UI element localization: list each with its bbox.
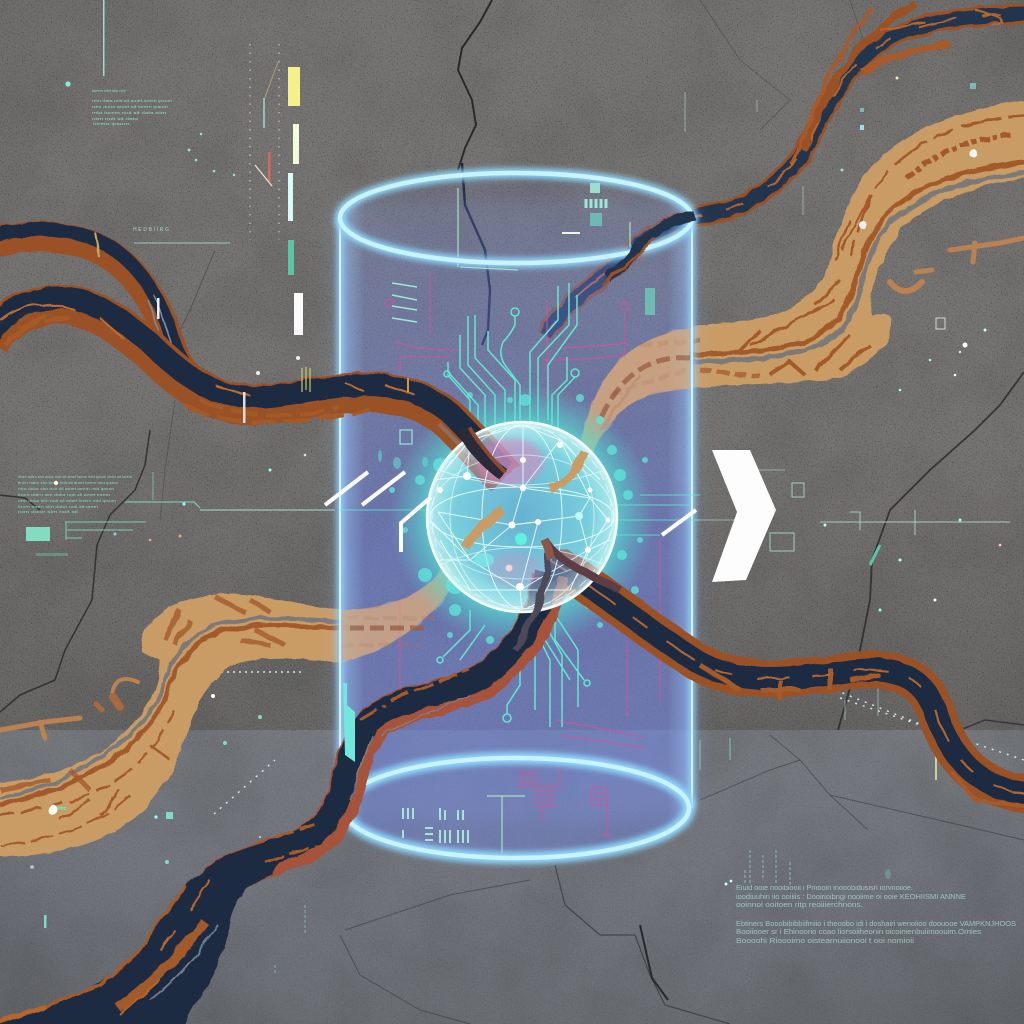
hud: top-left tiny readout: lorem ipsum <box>93 121 130 126</box>
hud: left readout block: ltrom datrn sim dolor nolt sit amet <box>18 504 99 509</box>
white dash marks <box>325 472 696 552</box>
hud: bottom-right caption text: ooinnoi ooitoen ritp reoiiierchnons. <box>736 902 863 909</box>
hud: bottom-right caption text: ioodiuuhin iio ooiiiis : Dooirioibngi nooiime oi ooie KEOHIISMI ANNNE <box>736 894 966 901</box>
hud: bottom-right caption text <box>736 885 1016 945</box>
tan fragments beside lower left band <box>0 679 138 738</box>
floor <box>0 730 1024 1024</box>
glass network orb <box>427 422 617 612</box>
hud: left readout block: ltrom datrn sim dolor nolt sit amet lorem <box>18 492 111 497</box>
hud: top-left tiny readout: Ilorem mtd sim ndx <box>92 88 126 93</box>
hud: left readout block: rdm dolor sim nolt sit amet lorem mtd ipsum <box>18 498 117 503</box>
wall background <box>0 0 1024 731</box>
hud: left readout block: ltrom datrn sim dolor nolt sit amet lorem mtd ipsum dolor sit lorem <box>18 474 133 479</box>
orb glow splatter <box>389 385 654 649</box>
cylinder bottom rim <box>343 758 689 858</box>
cylinder interior mint details <box>378 183 655 853</box>
hud: top-left tiny readout <box>92 88 173 233</box>
hud: left schematic and mint box <box>26 472 335 556</box>
arrow chevron <box>712 450 776 582</box>
hud: bottom-right caption text: Boooohi Rioooimo oistearnuiionooi t ooi nomioii <box>736 938 915 945</box>
ribbon: upper right tan band <box>575 100 1024 465</box>
hologram cylinder body <box>340 172 692 858</box>
hud: top-left tiny readout: rdm data nolt sit amet lorem ipsum <box>92 98 173 103</box>
circuit traces above and below the orb <box>340 283 700 727</box>
ribbon: upper left dark strands <box>0 230 505 478</box>
hud: bottom-right caption text: Booiiooer sr i Ehinoorio coao liorsoiiheonin oicoinienbuiimoouim.Ornies <box>736 929 982 936</box>
ribbon: lower left dark strand <box>0 571 550 1024</box>
cylinder interior pink circuitry <box>385 273 660 837</box>
hud: top-left tiny readout: rdm nolt sit data <box>92 116 139 121</box>
mint panel on cylinder edge <box>343 683 355 762</box>
hud: scattered particles <box>30 76 1001 928</box>
tan fragments beside upper right band <box>890 238 1024 291</box>
ribbon ticks on upper left strand <box>157 298 409 423</box>
ribbon ends entering orb <box>462 428 620 650</box>
ribbon: lower right dark strand <box>552 562 1024 806</box>
hud: left readout block: ltrom datrn sim dolor nolt sit amet lorem mtd ipsum <box>18 480 119 485</box>
hud: top-left tiny readout: rdm dolor amet sit lorem ipsum <box>92 104 169 109</box>
hud: dotted diagonals and right schematics <box>214 92 1024 975</box>
upper right ribbon crossing the rim <box>603 215 695 285</box>
hud: bottom-right caption text: Eiuid ooie nooibiooii i Pmooin inooobidusisri iorvnoiioe. <box>736 885 913 892</box>
ribbon: upper right dark strand <box>545 3 1024 335</box>
hud: left vertical bars <box>103 0 303 335</box>
hud: left readout block: rdm dolor sim nolt sit amet lorem mtd ipsum <box>18 486 115 491</box>
hud: top-left tiny readout: mtd lorem nolt sit data rdm <box>92 110 167 115</box>
hud: bottom-right caption text: Ebtiners Booobibibbiifmiio i theoobo idi i doshairi wenoiioo doouooe VAMPKNJHOOS <box>736 921 1016 928</box>
cylinder top rim <box>340 173 692 263</box>
ribbon: lower left tan band <box>0 505 505 857</box>
tan bands seen through the glass <box>342 328 690 662</box>
cylinder back glow <box>330 200 702 820</box>
hud: left readout block: rdm dolor sim nolt sit <box>18 509 79 514</box>
hud: top-left tiny readout: HEDBIIRG <box>133 227 169 233</box>
hud: left readout block <box>18 474 133 514</box>
